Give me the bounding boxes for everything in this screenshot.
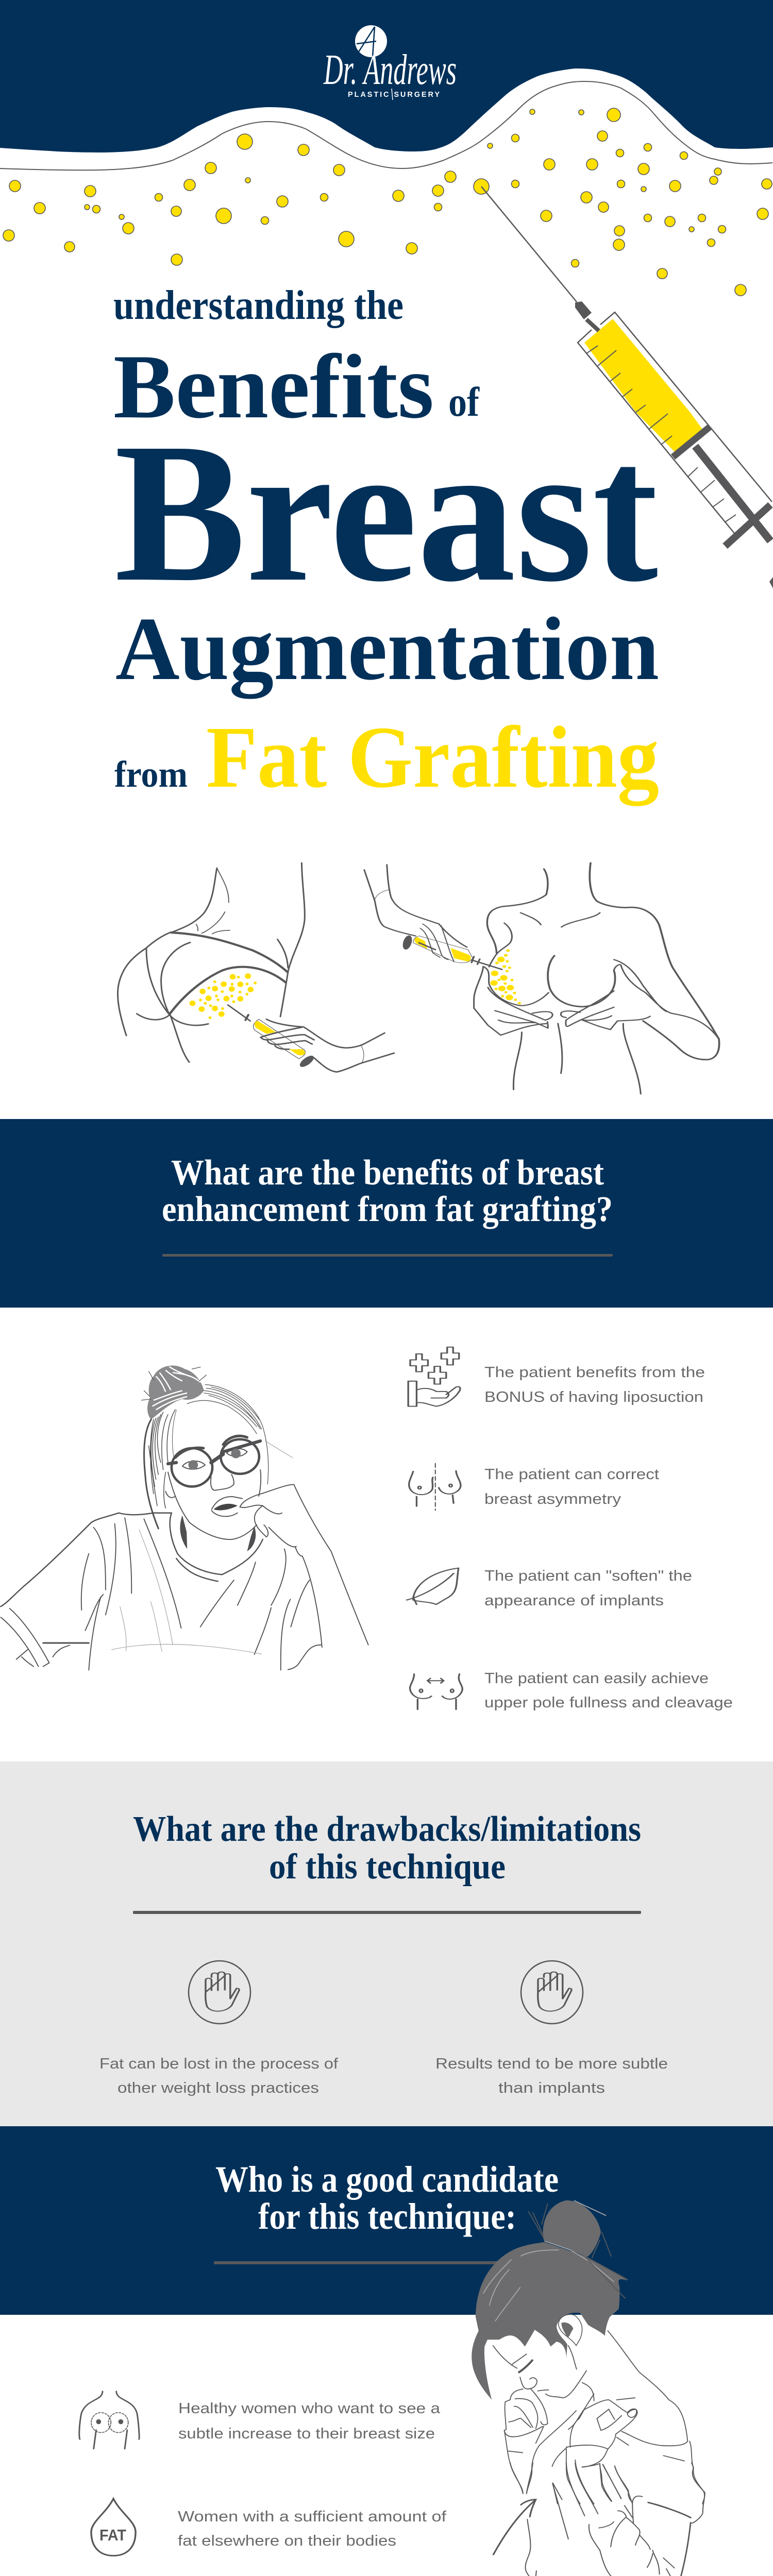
illustration: fat injection into breast (364, 863, 719, 1094)
candidate text: Healthy women who want to see a (178, 2400, 441, 2417)
heading: candidate: Who is a good candidate (215, 2159, 559, 2200)
benefits text: upper pole fullness and cleavage (484, 1694, 733, 1711)
arrow: left side (493, 2500, 536, 2554)
drawback text left: other weight loss practices (117, 2080, 319, 2096)
syringe (481, 187, 773, 588)
fat cell dots (3, 108, 772, 296)
candidate text: fat elsewhere on their bodies (178, 2533, 396, 2549)
heading: benefits: enhancement from fat grafting? (162, 1190, 613, 1229)
icon: hand with plus signs (408, 1347, 460, 1406)
benefits text: The patient can "soften" the (484, 1568, 692, 1584)
drawback text right: Results tend to be more subtle (435, 2056, 668, 2072)
drawback text left (99, 2056, 339, 2096)
navy wave banner (0, 0, 773, 152)
illustration: woman with glasses (1, 1366, 368, 1670)
illustration: fat removal from hip (117, 863, 394, 1072)
title: Augmentation (115, 599, 659, 699)
icon: cleavage (410, 1674, 462, 1709)
heading: drawbacks (133, 1809, 641, 1887)
icon: fat drop: FAT (99, 2526, 126, 2544)
heading: candidate (215, 2159, 559, 2237)
benefits text: The patient can easily achieve (484, 1670, 709, 1687)
title: Breast (114, 401, 660, 623)
benefits text: appearance of implants (484, 1592, 664, 1609)
logo: Dr. Andrews Plastic Surgery (323, 25, 457, 100)
icon: stop hand left (189, 1961, 250, 2024)
illustration: woman looking down, lower (493, 2463, 755, 2576)
heading: drawbacks: of this technique (269, 1847, 506, 1887)
icons: benefits list (407, 1347, 462, 1709)
candidate text: Women with a sufficient amount of (178, 2509, 447, 2525)
illustration: woman looking down, upper (472, 2200, 705, 2504)
icon: torso with dashed markings (79, 2392, 139, 2449)
icon: stop hand right (521, 1961, 583, 2024)
icon: breast asymmetry (409, 1463, 461, 1511)
title: Fat Grafting (206, 708, 659, 806)
heading: candidate: for this technique: (258, 2196, 516, 2237)
drawback text right: than implants (498, 2080, 605, 2096)
panel: candidate heading (0, 2126, 773, 2315)
wavy outline (0, 81, 772, 170)
benefits text: breast asymmetry (484, 1491, 621, 1507)
panel: drawbacks (0, 1761, 773, 2126)
title: of (448, 380, 480, 425)
benefits text (484, 1364, 733, 1711)
drawback text left: Fat can be lost in the process of (99, 2056, 339, 2072)
panel: candidate list (79, 2392, 447, 2576)
title: Benefits (113, 335, 434, 437)
logo: Dr. Andrews Plastic Surgery: PLASTIC SURGERY (348, 91, 440, 99)
icon: feather (407, 1568, 459, 1604)
panel: benefits heading (0, 1119, 773, 1308)
panel: benefits list (407, 1347, 733, 1711)
candidate text (178, 2400, 447, 2576)
title: understanding the (113, 283, 404, 328)
title (113, 283, 660, 806)
logo: Dr. Andrews Plastic Surgery: Dr. Andrews (323, 46, 457, 94)
benefits text: The patient benefits from the (484, 1364, 705, 1381)
title: from (114, 754, 188, 795)
benefits text: BONUS of having liposuction (484, 1389, 703, 1405)
heading: drawbacks: What are the drawbacks/limitations (133, 1809, 641, 1849)
drawback text right (435, 2056, 668, 2096)
heading: benefits: What are the benefits of breast (171, 1153, 604, 1193)
heading: benefits (162, 1153, 613, 1229)
benefits text: The patient can correct (484, 1466, 659, 1483)
panel: header (0, 0, 773, 806)
icon: fat drop (91, 2499, 136, 2556)
candidate text: subtle increase to their breast size (178, 2426, 435, 2442)
